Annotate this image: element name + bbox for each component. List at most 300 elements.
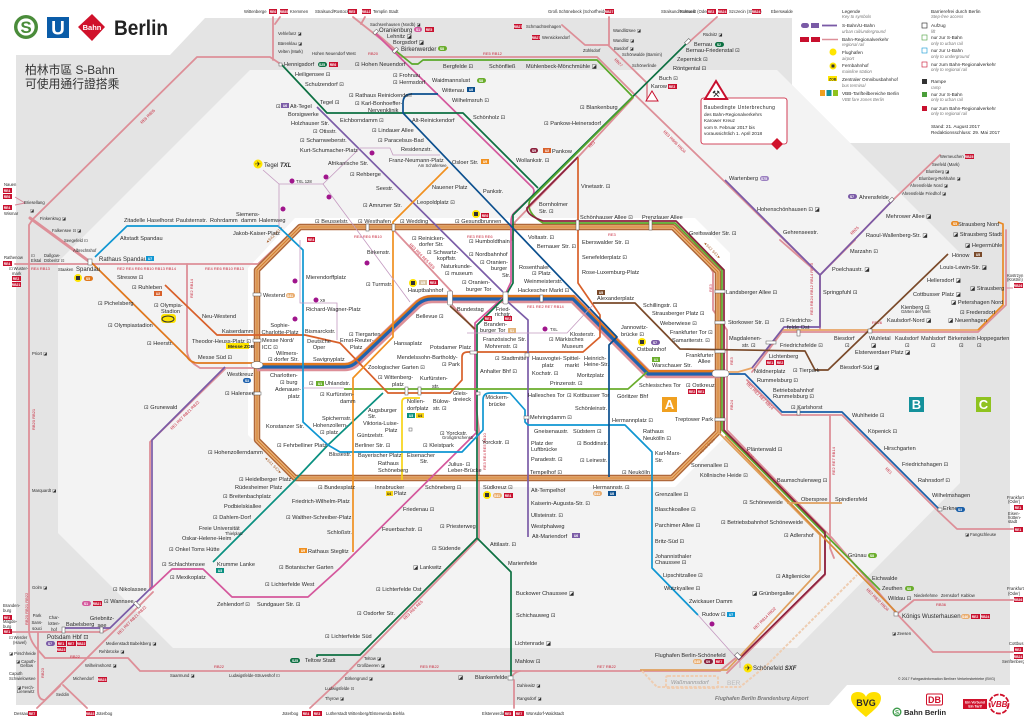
station labels: south: Schloßstr.	[327, 530, 352, 536]
line badges: S41	[594, 492, 600, 496]
station labels: centre: ⊡ Yorckstr.	[440, 431, 468, 437]
regional rail line labels: RE1	[884, 466, 894, 476]
station labels: centre: brücke	[489, 402, 505, 408]
station labels: centre: ⊡ Stadtmitte	[495, 356, 526, 362]
regional rail line labels: RB26	[872, 320, 883, 325]
station labels: centre	[340, 235, 713, 476]
logo: Bahn: Bahn	[83, 23, 102, 32]
station labels: east: Gärten der Welt	[901, 309, 931, 314]
station labels: north-east: Bernau	[694, 42, 712, 48]
regional rail line labels: RE7 RB14 RB22	[752, 605, 777, 631]
logo: VBB: Ein Verbund	[965, 700, 985, 704]
station labels: north-east: Leopoldplatz ⊡	[417, 200, 455, 206]
station labels: south: Lienewitz	[17, 689, 34, 694]
station labels: north-west: Sophie-	[270, 323, 290, 329]
station labels: south: Zwickauer Damm	[689, 599, 733, 605]
callout: construction notice: Karower Kreuz	[704, 118, 736, 123]
U2 red-orange	[165, 158, 600, 393]
station labels: east: Rummelsburg ⊡	[773, 394, 814, 400]
station labels: south: Ullsteinstr. ⊡	[531, 513, 563, 519]
station labels: north-west: Nauen	[4, 182, 17, 187]
station labels: north-east: Zühlsdorf	[583, 48, 601, 53]
regional rail line labels: RE7 RB22	[597, 664, 617, 669]
station labels: south: ⊡ Lichterfelde Süd	[325, 634, 372, 640]
station labels: east: Werneuchen	[940, 154, 964, 159]
logo: BVG heart: BVG	[856, 698, 876, 708]
station labels: south: Parchimer Allee ⊡	[655, 523, 700, 529]
station labels: east: Elsterwerdaer Platz ◪	[855, 350, 910, 356]
station labels: south: Schwielowsee	[9, 676, 36, 681]
station labels: east: stadt	[1008, 519, 1018, 524]
line badges: U8	[610, 492, 614, 496]
station labels: east: Niederlehme	[914, 593, 938, 598]
station labels: east: Cottbus	[1009, 641, 1023, 646]
legend: key to symbols: regional rail	[842, 42, 865, 47]
station labels: north-west: Uhlandstr.	[325, 381, 351, 387]
fare zone letters: A	[665, 397, 675, 412]
station labels: centre: Nollen-	[407, 399, 425, 405]
U9 orange	[353, 167, 448, 552]
line badges: RE1	[698, 390, 704, 394]
station labels: centre: Samariterstr. ⊡	[672, 338, 710, 344]
station labels: south: Hermannstr. ⊡	[593, 485, 630, 491]
station labels: east: Betriebsbahnhof	[773, 388, 814, 394]
station labels: north-east: Schönwalde (Barnim)	[622, 52, 663, 57]
station labels: north-west: Wilmers-	[276, 351, 298, 357]
station labels: north-west: ⊡ Otisstr.	[313, 129, 337, 135]
station labels: north-west: Messe Süd ⊡	[198, 355, 232, 361]
logo: S-Bahn Berlin: S	[895, 710, 899, 716]
station labels: east: ◪ Zeesen	[892, 631, 912, 636]
station labels: east: Treptower Park	[675, 417, 713, 423]
line badges: RB27	[532, 36, 540, 40]
U5 brown	[450, 254, 948, 370]
line badges: RE2	[13, 277, 19, 281]
station labels: north-west: ⊡	[309, 381, 314, 387]
station labels: east: Friedrichshagen ⊡	[902, 462, 948, 468]
line badges: RE1	[58, 642, 64, 646]
line badges: U8	[469, 88, 473, 92]
station labels: north-west: Döberitz ⊡	[44, 258, 64, 263]
station labels: north-east: Alt-Reinickendorf	[412, 118, 455, 124]
line badges: S41	[494, 494, 500, 498]
station labels: south: Medienstadt Babelsberg ◪	[106, 641, 156, 646]
station labels: east: Baumschulenweg ⊡	[777, 478, 827, 484]
station labels: north-east: Bernau-Friedenstal ⊡	[686, 48, 740, 54]
station labels: south: Alt-Tempelhof	[531, 488, 566, 494]
line badges: RB24	[752, 10, 760, 14]
station labels: centre: Ostbahnhof	[637, 347, 666, 353]
station labels: south: burg	[3, 608, 12, 613]
station labels: centre: Prinzenstr. ⊡	[550, 381, 583, 387]
regional rail line labels: RE3	[587, 139, 597, 149]
legend: step-free access: Barrierefrei durch Berlin	[931, 9, 981, 14]
callout: construction notice: vom 9. Februar 2017 bis	[704, 125, 755, 130]
station labels: south: Schichauweg ⊡	[516, 613, 556, 619]
regional rail line labels: RE6 RB55	[139, 107, 157, 125]
interchange station markers	[62, 29, 942, 680]
station labels: centre: Luftbrücke	[531, 447, 557, 453]
station labels: south: ⊡ Priesterweg	[440, 524, 476, 530]
line badges: RB26	[1014, 284, 1022, 288]
station labels: north-west: Elstal	[31, 258, 41, 263]
logo: S-Bahn Berlin: Bahn Berlin	[904, 708, 947, 717]
station labels: south: ⊡ Onkel Toms Hütte	[169, 547, 220, 553]
station labels: centre: Bayerischer Platz	[358, 453, 402, 459]
station labels: south: Podbielskiallee	[224, 504, 261, 510]
station labels: centre: Rosenthaler	[519, 265, 549, 271]
line badges: S1	[416, 28, 420, 32]
regional rail line labels: RE3 RE4 RE5	[402, 599, 424, 621]
line badges: RE5	[426, 28, 432, 32]
station labels: north-west: Altstadt Spandau	[120, 236, 163, 242]
regional rail line labels: RE4 RE6 RB10 RB13	[205, 266, 245, 271]
station labels: south: Friedenau ⊡	[403, 507, 434, 513]
legend: key to symbols: Flughafen	[842, 50, 863, 55]
callout: construction notice: Baubedingte Unterbrechung	[704, 105, 775, 111]
station labels: south: ⊡ Südende	[432, 546, 461, 552]
line badges: U2	[156, 292, 160, 296]
station labels: north-east	[340, 9, 794, 237]
station labels: centre: Hallesches Tor	[528, 393, 565, 399]
station labels: east: ⊡ Betriebsbahnhof Schöneweide	[721, 520, 803, 526]
station labels: east: Grünau	[848, 553, 867, 559]
line badges: S1	[84, 602, 88, 606]
station labels: south: Krumme Lanke	[217, 562, 255, 568]
station labels: south: Alt-Mariendorf	[532, 534, 568, 540]
station labels: centre: Yorckstr. ⊡	[482, 440, 509, 446]
station labels: south: ⊡ Nikolassee	[113, 587, 147, 593]
line badges: U1	[654, 358, 658, 362]
station labels: north-west: ⊡ Olympia-	[154, 303, 183, 309]
legend: key to symbols: Key to symbols	[842, 14, 872, 19]
station labels: east: ◪ Hegermühle	[965, 243, 1002, 249]
legend: step-free access: nur zum Bahn-Regionalverkehr	[931, 106, 996, 111]
station labels: north-east: Schönfließ	[489, 64, 516, 70]
station labels: north-west: Seestr.	[376, 186, 394, 192]
line badges: RE5	[505, 712, 511, 716]
callout: construction notice: voraussichtlich 1. April 2018	[704, 131, 762, 136]
station labels: centre: Warschauer Str.	[652, 363, 692, 369]
fare zone letters: B	[912, 397, 921, 412]
ring line labels: ◄S41 S42►	[263, 455, 283, 475]
legend: key to symbols: Zentraler Omnibusbahnhof	[842, 77, 898, 82]
station labels: north-east: Residenzstr.	[401, 147, 432, 153]
station labels: east: Blumberg ◪	[926, 169, 949, 174]
S7 S75 purple lines	[63, 180, 893, 628]
station labels: north-east: Pankstr.	[483, 189, 504, 195]
regional rail line labels: RE1 RE7 RB21 RB22	[116, 604, 148, 636]
station labels: east: Cottbusser Platz ◪	[913, 292, 961, 298]
line badges: S1	[510, 329, 514, 333]
note in Chinese: 柏林市區 S-Bahn	[25, 63, 115, 77]
station labels: centre: Tempelhof ⊡	[530, 470, 562, 476]
station labels: north-east: Nervenklinik	[368, 108, 399, 114]
station labels: centre: Augsburger	[368, 408, 397, 414]
station labels: north-east: Stralsund/Rostock	[661, 9, 696, 14]
station labels: north-east: Nauener Platz	[432, 185, 468, 191]
station labels: east: Frankfurt	[1007, 495, 1024, 500]
station labels: south: Birkengrund ◪	[345, 676, 373, 681]
station labels: north-west: Kaiserdamm	[222, 329, 254, 335]
station labels: centre: Museum	[562, 344, 584, 350]
station labels: north-west: Schulzendorf ⊡	[305, 82, 344, 88]
station labels: east: Spindlersfeld	[835, 497, 867, 503]
station labels: north-west: Seegefeld ⊡	[64, 238, 88, 243]
line badges: RB24	[1014, 655, 1022, 659]
station labels: east: ⊡	[845, 343, 850, 349]
station labels: centre: Südstern ⊡	[573, 429, 602, 435]
station labels: north-west: Mierendorffplatz	[306, 275, 346, 281]
legend: key to symbols: Bahn-Regionalverkehr	[842, 37, 889, 42]
station labels: south: Grenzallee ⊡	[655, 492, 688, 498]
station labels: east: Erkner	[943, 506, 960, 512]
station labels: north-west: Templin Stadt	[373, 9, 399, 14]
station labels: centre: Rose-Luxemburg-Platz	[582, 270, 639, 276]
callout: construction notice	[701, 81, 787, 150]
station labels: north-east: Schmachtenhagen	[526, 24, 562, 29]
station labels: east: Hönow	[952, 253, 970, 259]
station labels: south: Jüterbog	[282, 711, 299, 716]
station labels: north-east: Schönerlinde	[632, 63, 657, 68]
station labels: east: Rahnsdorf ⊡	[918, 478, 950, 484]
line badges: U7	[148, 257, 152, 261]
station labels: centre: platz	[542, 363, 554, 369]
station labels: north-west: Holzhauser Str.	[291, 121, 330, 127]
station labels: east: hütten-	[1008, 515, 1022, 520]
legend: step-free access: lift	[931, 29, 936, 34]
regional rail line labels: RB20	[368, 51, 379, 56]
station labels: east: Gehrenseestr.	[783, 230, 819, 236]
station labels: south: ⊡ Lichterfelde Ost	[376, 587, 422, 593]
line badges: S3	[958, 508, 962, 512]
station labels: east: Landsberger Allee ⊡	[726, 290, 777, 296]
station labels: north-east: ⊡ Pankow-Heinersdorf	[544, 121, 601, 127]
station labels: east: Ahrensfelde Nord ◪	[910, 183, 948, 188]
line badges: S45	[694, 660, 700, 664]
station labels: north-west: Oper	[313, 345, 325, 351]
station labels: centre: str.	[432, 384, 440, 390]
station labels: centre: ⊡ museum	[445, 271, 473, 277]
station labels: north-west: Bismarckstr.	[305, 329, 336, 335]
station labels: north-west: Rathenow	[4, 255, 24, 260]
station labels: centre: Hackescher Markt ⊡	[518, 288, 569, 294]
legend: step-free access: Redaktionsschluss: 29. Mai 2017	[931, 130, 1000, 135]
station labels: east: Kaulsdorf-Nord ◪	[887, 318, 931, 324]
station labels: east: Sonnenallee ⊡	[691, 463, 728, 469]
line badges: RE7	[68, 642, 74, 646]
station labels: south: Attilastr. ⊡	[490, 542, 516, 548]
line badges: S2	[717, 43, 721, 47]
station labels: east: Marzahn ⊡	[850, 249, 878, 255]
regional rail line labels: RE3 RB66 RB24	[662, 129, 688, 154]
station labels: south: Caputh	[9, 671, 23, 676]
station labels: centre: ⊡ Platz	[532, 271, 551, 277]
line badges: RE6	[330, 63, 336, 67]
station labels: south: Feuerbachstr. ⊡	[382, 527, 422, 533]
line badges: S8	[479, 79, 483, 83]
line badges: RE4	[303, 712, 309, 716]
station labels: east: Königs Wusterhausen	[902, 614, 961, 620]
station labels: north-west: ICC ⊡	[262, 345, 278, 351]
station labels: north-east: Wittenau	[442, 88, 464, 94]
station labels: centre: platz	[392, 382, 404, 388]
legend: step-free access: only to regional rail	[931, 67, 968, 72]
station labels: east: Flughafen Berlin-Schönefeld	[655, 653, 726, 659]
station labels: south: Seddin	[56, 692, 70, 697]
station labels: centre: Jannowitz-	[621, 325, 648, 331]
station labels: south: Saarmund ◪	[170, 673, 194, 678]
icons: airports and mainline stations: ✈	[745, 666, 751, 672]
line badges: RE4	[4, 206, 10, 210]
station labels: north-west: Siemens-	[236, 212, 260, 218]
station labels: north-west: ⊡ dorfer Str.	[268, 357, 299, 363]
station labels: north-west: ⊡ burg	[280, 380, 297, 386]
station labels: south: Wutzkyallee ⊡	[664, 586, 700, 592]
station labels: centre: Bellevue ⊡	[416, 314, 444, 320]
station labels: south: lotten-	[48, 621, 60, 626]
station labels: east: Kostrzyn	[1007, 273, 1024, 278]
bus badges	[280, 150, 714, 626]
airport BER dashed connection	[642, 575, 857, 688]
station labels: centre: Bernauer Str. ⊡	[537, 244, 576, 250]
station labels: north-east: Zepernick ⊡	[677, 57, 708, 63]
station labels: south: burg	[3, 624, 12, 629]
station labels: centre: Naturkunde-	[441, 264, 472, 270]
station labels: north-west: platz	[288, 394, 300, 400]
logo: U-Bahn	[47, 17, 69, 40]
station labels: centre: Bundestag	[457, 307, 484, 313]
station labels: centre: Gleis-	[453, 391, 468, 397]
logo: VBB: Ein Tarif	[968, 704, 983, 708]
legend: key to symbols: VBB fare zones Berlin	[842, 97, 885, 102]
station labels: north-west: Velten (Mark)	[278, 49, 304, 54]
line badges: RE3	[708, 10, 714, 14]
station labels: east: Hellersdorf ◪	[927, 278, 961, 284]
station labels: centre: ⊡ Reinicken-	[412, 236, 445, 242]
line badges: RB21	[12, 283, 20, 287]
station labels: east: Frankfurt	[1007, 586, 1024, 591]
station labels: north-west: Spichernstr.	[322, 416, 352, 422]
station labels: north-west: Konstanzer Str.	[266, 424, 305, 430]
station labels: east: Wildau ⊡	[888, 596, 911, 602]
note in Chinese: 可使用通行證搭乘	[25, 77, 120, 91]
station labels: north-east: Eberswalde	[771, 9, 794, 14]
station labels: east: Raoul-Wallenberg-Str. ◪	[866, 233, 928, 239]
line badges: S25	[292, 659, 298, 663]
station labels: south: souci	[32, 626, 42, 631]
station labels: centre: Spittel-	[563, 356, 581, 362]
station labels: east: Wuhletal	[869, 336, 891, 342]
station labels: centre: ⊡ Turmstr.	[366, 282, 393, 288]
regional rail line labels: RB22	[214, 664, 225, 669]
station labels: centre: markt	[565, 363, 579, 369]
regional rail line labels: RE5 RB22	[420, 664, 440, 669]
station labels: south: Kaiserin-Augusta-Str. ⊡	[531, 501, 590, 507]
station labels: centre: dreieck	[453, 397, 471, 403]
station labels: centre: Schlesisches Tor	[639, 383, 681, 389]
line badges: RE4	[505, 494, 511, 498]
station labels: north-west: Richard-Wagner-Platz	[306, 307, 361, 313]
station labels: east	[655, 154, 1024, 672]
station labels: north-east: ⊡ Paracelsus-Bad	[378, 138, 424, 144]
station labels: north-west: ⊡ Rehberge	[350, 172, 381, 178]
station labels: north-west	[4, 9, 501, 458]
station labels: centre: ⊡ Oranien-	[462, 280, 490, 286]
line badges: U4	[387, 492, 391, 496]
line badges: RB55	[280, 10, 288, 14]
station labels: north-west: Vehlefanz ◪	[278, 31, 302, 36]
ring line labels: ◄S42 S41►	[264, 225, 284, 245]
ring line labels: ◄S41 S42►	[697, 436, 717, 456]
station labels: centre: Julius- ⊡	[448, 462, 470, 468]
station labels: north-west: ⊡	[31, 253, 35, 258]
station labels: centre: ⊡ Schwartz-	[427, 250, 458, 256]
station labels: south: ⊡ Dahlem-Dorf	[213, 515, 251, 521]
regional rail line labels: RE5 RB12	[483, 51, 503, 56]
station labels: north-west: Stresow ⊡	[117, 275, 143, 281]
station labels: centre: Anhalter Bhf ⊡	[480, 369, 517, 375]
station labels: centre: ⊡ Märkisches	[549, 337, 584, 343]
station labels: centre: str. ⊡	[433, 406, 447, 412]
station labels: centre: Berliner Str. ⊡	[355, 443, 390, 449]
station labels: centre: brücke ⊡	[621, 332, 644, 338]
station labels: south: Branden-	[3, 603, 21, 608]
station labels: north-east: Sachsenhausen (Nordb) ◪	[370, 22, 421, 27]
station labels: north-east: Szczecin (Stettin)	[729, 9, 762, 14]
legend: key to symbols: VBB-Tarifteilbereiche Berlin	[842, 91, 899, 96]
line badges: RB24	[981, 615, 989, 619]
legend: step-free access: only to urban rail	[931, 97, 964, 102]
station labels: east: ◪ Grünbergallee	[752, 591, 794, 597]
station labels: centre: Hausvogtei-	[532, 356, 562, 362]
line badges: U6	[574, 534, 578, 538]
station labels: south: Friedrich-Wilhelm-Platz	[292, 499, 350, 505]
station labels: south: hof	[51, 627, 58, 632]
station labels: south: Rehbrücke ◪	[99, 649, 124, 654]
station labels: east: Eisen-	[1008, 511, 1020, 516]
station labels: east: Seefeld (Mark)	[932, 162, 960, 167]
station labels: centre: Eberswalder Str. ⊡	[582, 240, 629, 246]
station labels: north-west: ⊡ Olympiastadion	[108, 323, 153, 329]
regional rail line labels: RE3 RB24 RB12 RB14 RB25	[809, 262, 814, 315]
station labels: south: Großbeeren ◪	[357, 663, 385, 668]
legend: step-free access: Aufzug	[931, 23, 946, 28]
line badges: RE3	[314, 712, 320, 716]
line badges: S9	[532, 149, 536, 153]
station labels: north-east: ⊡ Rathaus Reinickendorf	[349, 93, 412, 99]
station labels: east: Hoppegarten	[977, 336, 1009, 342]
line badges: RE1	[485, 317, 491, 321]
station labels: centre: Birkenstr.	[367, 250, 391, 256]
station labels: east: Wartenberg	[729, 176, 758, 182]
station labels: north-east: Rüdnitz ◪	[703, 32, 722, 37]
fare zone letters	[662, 397, 991, 412]
legend: step-free access: Rampe	[931, 79, 947, 84]
station labels: north-east: Schwedt (Oder)	[680, 9, 710, 14]
line badges: S9	[706, 660, 710, 664]
station labels: south: ⊡ Wannsee	[104, 599, 134, 605]
line badges: S5	[953, 222, 957, 226]
line badges: RB27	[514, 25, 522, 29]
station labels: north-west: Spandau	[76, 267, 100, 273]
station labels: south: Blankenfelde	[475, 675, 507, 681]
regional rail line labels: RB22	[70, 654, 81, 659]
station labels: north-west: Hohen Neuendorf West	[312, 51, 357, 56]
station labels: north-west: Tegel TXL	[264, 163, 292, 169]
station labels: north-east: Wensickendorf	[542, 35, 570, 40]
station labels: south: Schöneberg ⊡	[425, 485, 461, 491]
